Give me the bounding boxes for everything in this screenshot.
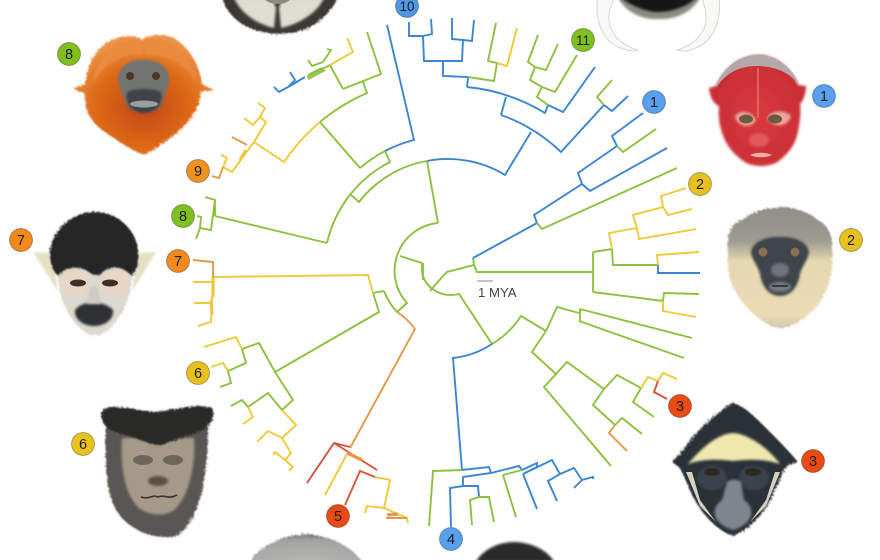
portrait: golden lion tamarin (8) — [73, 35, 214, 155]
clade 9: upper left — [212, 32, 381, 178]
badge 8 by portrait — [58, 42, 80, 66]
badge 10 — [396, 0, 418, 18]
badge 6 on tree — [186, 362, 210, 384]
portrait: squirrel monkey (7) — [33, 212, 156, 336]
badge 7 on tree — [166, 250, 190, 272]
portrait: red uakari (1) — [709, 55, 806, 166]
badge 3 by portrait: 3 — [809, 454, 817, 470]
clade 3: green lower right — [532, 307, 692, 466]
phylogenetic tree — [193, 18, 700, 527]
portrait: bottom left grey monkey crown — [250, 534, 362, 560]
scale bar: 1 MYA — [478, 285, 517, 300]
clade 7: yellow left — [193, 260, 213, 326]
clade 1: blue upper right — [385, 18, 677, 258]
badge 2 by portrait — [840, 228, 862, 252]
badge 6 by portrait: 6 — [79, 437, 87, 453]
badge 3 by portrait — [802, 450, 824, 472]
badge 1 on tree — [642, 90, 666, 114]
badge 3 on tree: 3 — [676, 399, 684, 415]
portrait: top right monkey with white whiskers — [597, 0, 720, 51]
portrait: bottom right black monkey crown — [476, 542, 554, 560]
badge 2 on tree — [688, 172, 712, 196]
badge 9 — [186, 160, 210, 182]
badge 2 by portrait: 2 — [847, 233, 855, 249]
clade 5: red and orange bottom — [307, 443, 408, 523]
badge 3 on tree — [668, 394, 692, 418]
badge 1 on tree: 1 — [650, 95, 658, 111]
badge 5 — [326, 504, 350, 528]
badge 2 on tree: 2 — [696, 177, 704, 193]
portrait: crested gibbon (3) — [672, 403, 798, 536]
badge 6 by portrait — [72, 432, 94, 456]
clade 6: green and yellow lower left — [204, 337, 296, 471]
clade 2: yellow right — [593, 188, 700, 317]
badge 5: 5 — [334, 509, 342, 525]
badge 8 on tree: 8 — [179, 209, 187, 225]
badge 7 on tree: 7 — [174, 254, 182, 270]
badge 1 by portrait: 1 — [820, 89, 828, 105]
badge 7 by portrait: 7 — [17, 233, 25, 249]
badge 8 by portrait: 8 — [65, 47, 73, 63]
root and backbone — [213, 122, 593, 448]
badge 4 — [440, 528, 462, 550]
clade 8: green left — [196, 197, 215, 239]
badge 11 — [572, 28, 594, 52]
portrait: top left monkey chin — [222, 0, 337, 34]
badge 9: 9 — [194, 164, 202, 180]
badge 7 by portrait — [10, 228, 32, 252]
badge 11: 11 — [576, 33, 590, 48]
badge 1 by portrait — [812, 84, 836, 108]
badge 6 on tree: 6 — [194, 366, 202, 382]
clade 4: blue bottom — [429, 344, 593, 527]
badge 8 on tree — [172, 204, 194, 228]
portrait: vervet (2) — [728, 207, 832, 328]
badge 4: 4 — [447, 532, 455, 548]
portrait: capuchin (6) — [101, 406, 213, 537]
